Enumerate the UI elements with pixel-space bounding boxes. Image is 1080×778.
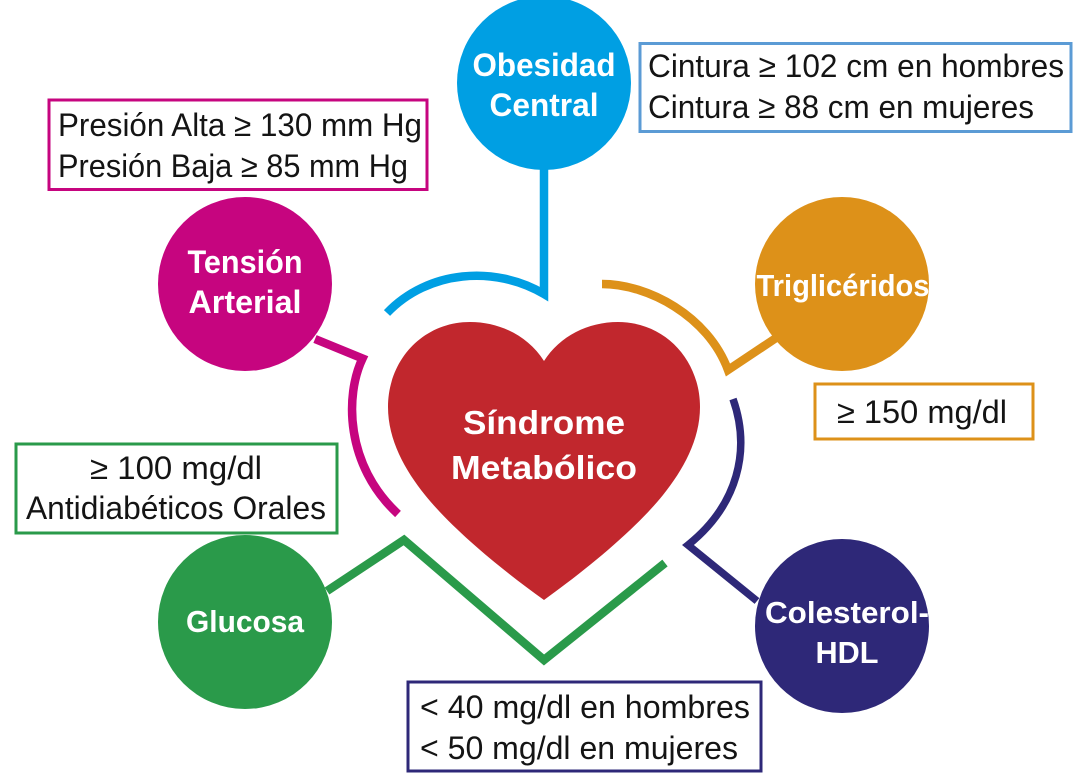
- node: colesterol-HDL: HDL: [816, 635, 878, 670]
- node: tensión arterial: [158, 197, 332, 371]
- node: colesterol-HDL: [755, 539, 929, 713]
- node: colesterol-HDL: Colesterol-: [765, 595, 929, 630]
- node: glucosa: [158, 535, 332, 709]
- callout: presión: Presión Alta ≥ 130 mm Hg: [58, 107, 422, 143]
- callout: colesterol-HDL value: < 40 mg/dl en hombres: [420, 689, 750, 725]
- connector: triglicéridos: [602, 284, 776, 370]
- callout: colesterol-HDL value: [408, 682, 761, 771]
- node: obesidad central: [457, 0, 631, 170]
- node: obesidad central: Obesidad: [472, 47, 616, 83]
- callout: presión: [49, 100, 427, 190]
- callout: triglicéridos value: ≥ 150 mg/dl: [837, 394, 1007, 430]
- callout: presión: Presión Baja ≥ 85 mm Hg: [58, 148, 408, 184]
- node: triglicéridos: [755, 197, 930, 371]
- callout: colesterol-HDL value: < 50 mg/dl en mujeres: [420, 730, 738, 766]
- node: triglicéridos: Triglicéridos: [756, 268, 930, 303]
- callout: cintura: [640, 44, 1071, 132]
- heart title: Metabólico: [451, 449, 637, 486]
- heart title: [451, 404, 637, 486]
- callout: glucosa value: ≥ 100 mg/dl: [90, 450, 262, 486]
- callout: cintura: Cintura ≥ 102 cm en hombres: [648, 48, 1064, 84]
- connector: obesidad central: [387, 165, 544, 313]
- callout: cintura: Cintura ≥ 88 cm en mujeres: [648, 89, 1034, 125]
- central heart: [388, 322, 700, 600]
- callout: glucosa value: [16, 444, 337, 533]
- connector: tensión arterial: [315, 339, 398, 514]
- node: obesidad central: Central: [490, 87, 598, 123]
- node: glucosa: Glucosa: [186, 604, 305, 639]
- callout: glucosa value: Antidiabéticos Orales: [26, 490, 326, 526]
- node: tensión arterial: Arterial: [188, 284, 302, 320]
- node: tensión arterial: Tensión: [188, 244, 302, 280]
- connector: glucosa: [327, 540, 665, 660]
- heart title: Síndrome: [463, 404, 625, 441]
- connector: colesterol-HDL: [688, 399, 757, 601]
- callout: triglicéridos value: [815, 384, 1033, 439]
